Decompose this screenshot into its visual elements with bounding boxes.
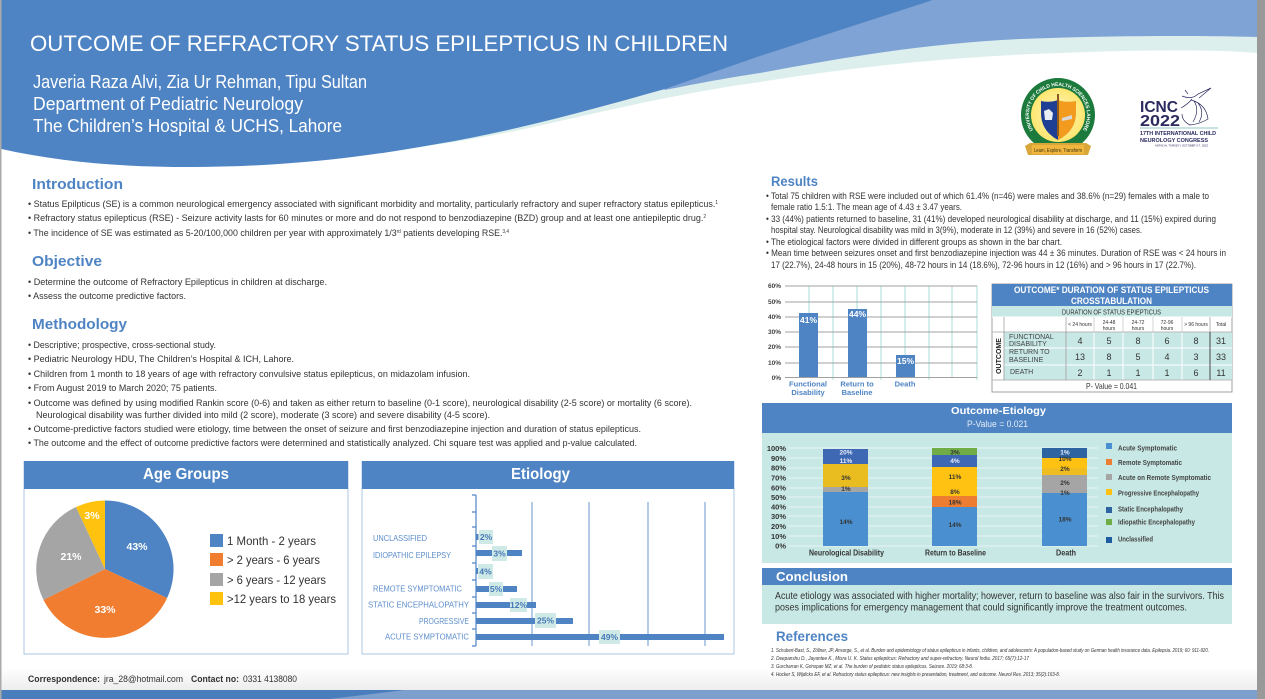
stacked bar chart: 1%: [1060, 490, 1070, 497]
horizontal bar chart: etiology: ACUTE SYMPTOMATIC: [385, 632, 469, 642]
footer band: [2, 690, 1258, 699]
stacked bar legend: Unclassified: [1118, 536, 1153, 544]
table: outcome by duration of status epilepticus: hours: [1132, 326, 1145, 332]
table: outcome by duration of status epilepticus: 31: [1216, 336, 1226, 346]
stacked bar chart: 11%: [840, 458, 853, 465]
logo: ICNC 2022: ANTALYA, TURKEY | OCTOBER 3-7, 2022: [1155, 144, 1208, 148]
heading: outcome-etiology: Outcome-Etiology: [951, 405, 1046, 417]
stacked bar chart: 0%: [775, 542, 786, 550]
pie legend: [210, 534, 336, 606]
text block: methodology bullets: • From August 2019 to March 2020; 75 patients.: [28, 383, 217, 394]
table: outcome by duration of status epilepticus: 8: [1135, 336, 1141, 346]
text block: introduction bullets: [28, 199, 718, 239]
stacked bar chart: 50%: [771, 493, 786, 502]
panel: age groups: [24, 461, 348, 654]
stacked bar chart: 4%: [950, 458, 960, 465]
stacked bar legend: Remote Symptomatic: [1118, 460, 1182, 467]
text block: introduction bullets: 2: [703, 214, 706, 220]
pie legend: > 2 years - 6 years: [227, 553, 320, 567]
table: outcome by duration of status epilepticus: < 24 hours: [1068, 322, 1092, 328]
pie legend: 1 Month - 2 years: [227, 534, 316, 548]
bar chart: outcome at discharge: 30%: [768, 329, 781, 336]
table: outcome by duration of status epilepticus: P- Value = 0.041: [1086, 381, 1137, 391]
stacked bar chart: 10%: [1058, 456, 1072, 463]
horizontal bar chart: etiology: 4%: [479, 566, 492, 576]
stacked bar chart: 14%: [948, 522, 962, 529]
bar chart: outcome at discharge: 40%: [768, 314, 781, 321]
stacked bar legend: Acute on Remote Symptomatic: [1118, 475, 1211, 482]
text block: objective bullets: • Assess the outcome predictive factors.: [28, 291, 186, 302]
bar chart: outcome at discharge: Death: [895, 380, 916, 388]
conclusion text: poses implications for emergency management that could significantly improve the treatment outcomes.: [775, 602, 1187, 614]
heading: outcome-etiology: P-Value = 0.021: [967, 419, 1028, 430]
stacked bar chart: 2%: [1060, 466, 1070, 473]
bar chart: outcome at discharge: 15%: [897, 356, 914, 366]
heading: Introduction: Introduction: [32, 176, 123, 193]
stacked bar chart: 11%: [949, 474, 962, 481]
table: outcome by duration of status epilepticus: 3: [1193, 352, 1199, 362]
stacked bar chart: 18%: [948, 500, 962, 506]
table: outcome by duration of status epilepticus: 24-48: [1103, 320, 1116, 326]
table title: OUTCOME* DURATION OF STATUS EPILEPTICUS: [1014, 285, 1209, 295]
reference list: 2. Deepanshu D., Jayantee K., Misra U. K. Status epilepticus: Refractory and super-refractory. Neurol India. 2017; 65(7):12-17: [770, 656, 1030, 662]
panel: conclusion: [762, 568, 1232, 624]
table: outcome by duration of status epilepticus: 6: [1164, 336, 1170, 346]
heading: outcome-etiology: [951, 405, 1046, 430]
bar chart: outcome at discharge: Functional: [789, 380, 827, 388]
bar chart: outcome at discharge: 20%: [768, 344, 781, 351]
authors and affiliation: Javeria Raza Alvi, Zia Ur Rehman, Tipu Sultan: [33, 72, 367, 92]
heading: Objective: Objective: [32, 253, 102, 270]
table: outcome by duration of status epilepticus: 5: [1106, 336, 1112, 346]
text block: objective bullets: [28, 277, 327, 302]
table: outcome by duration of status epilepticus: 5: [1135, 352, 1141, 362]
table: outcome by duration of status epilepticus: DURATION OF STATUS EPIEPTICUS: [1062, 310, 1161, 316]
logo: ICNC 2022: 2022: [1140, 113, 1180, 130]
text block: objective bullets: • Determine the outcome of Refractory Epilepticus in children at discharge.: [28, 277, 327, 288]
header banner: [2, 0, 1257, 167]
heading: conclusion: Conclusion: [776, 569, 848, 584]
panel: outcome-etiology: [762, 403, 1232, 563]
stacked bar chart: 14%: [839, 519, 853, 526]
stacked bar chart: Neurological Disability: [809, 548, 884, 558]
text block: introduction bullets: • The incidence of SE was estimated as 5-20/100,000 children per year with approximately 1/3: [28, 228, 424, 239]
pie chart: age groups: 21%: [60, 551, 82, 563]
logo: ICNC 2022: 17TH INTERNATIONAL CHILD: [1140, 131, 1216, 137]
stacked bar chart: 3%: [841, 475, 851, 482]
bar chart: outcome at discharge: Return to: [840, 380, 874, 388]
table: outcome by duration of status epilepticus: 1: [1164, 368, 1170, 378]
correspondence line: [28, 674, 297, 684]
text block: methodology bullets: • Outcome-predictive factors studied were etiology, time between the onset of seizure and first benzodiazepine injection and duration of status epilepticus.: [28, 424, 641, 435]
table: outcome by duration of status epilepticus: 4: [1077, 336, 1083, 346]
table: outcome by duration of status epilepticus: 6: [1193, 368, 1199, 378]
stacked bar chart: 60%: [771, 484, 786, 492]
text block: methodology bullets: • Descriptive; prospective, cross-sectional study.: [28, 340, 216, 351]
text block: introduction bullets: 3,4: [503, 229, 509, 235]
stacked bar legend: Acute Symptomatic: [1118, 446, 1177, 452]
stacked bar chart: Return to Baseline: [925, 548, 986, 558]
text block: methodology bullets: • Pediatric Neurology HDU, The Children’s Hospital & ICH, Lahore.: [28, 354, 294, 365]
bar chart: outcome at discharge: 0%: [772, 375, 781, 382]
stacked bar legend: [1106, 443, 1211, 544]
logo: ICNC 2022: NEUROLOGY CONGRESS: [1140, 138, 1208, 144]
table: outcome by duration of status epilepticus: DISABILITY: [1009, 341, 1047, 348]
table: outcome by duration of status epilepticus: 24-72: [1132, 320, 1145, 326]
authors and affiliation: Department of Pediatric Neurology: [33, 94, 303, 114]
table: outcome by duration of status epilepticus: 1: [1106, 368, 1112, 378]
horizontal bar chart: etiology: 5%: [490, 584, 503, 594]
table title: CROSSTABULATION: [1071, 296, 1152, 306]
stacked bar legend: Idiopathic Encephalopathy: [1118, 520, 1195, 526]
stacked bar chart: 30%: [771, 512, 786, 521]
stacked bar chart: 90%: [771, 454, 786, 463]
correspondence line: Correspondence:: [28, 674, 100, 684]
pie chart: age groups: 43%: [126, 541, 148, 553]
text block: results bullets: [766, 191, 1226, 271]
horizontal bar chart: etiology: STATIC ENCEPHALOPATHY: [368, 600, 469, 610]
logo: ICNC 2022: [1140, 88, 1218, 148]
table: outcome by duration of status epilepticus: BASELINE: [1009, 357, 1044, 364]
heading: etiology: Etiology: [511, 466, 570, 483]
table: outcome by duration of status epilepticus: [992, 284, 1232, 392]
stacked bar chart: 20%: [839, 450, 853, 456]
authors and affiliation: The Children’s Hospital & UCHS, Lahore: [33, 116, 342, 136]
stacked bar chart: 20%: [771, 522, 786, 531]
correspondence line: jra_28@hotmail.com: [103, 674, 183, 684]
horizontal bar chart: etiology: 3%: [493, 548, 506, 558]
heading: references: References: [776, 628, 848, 644]
reference list: 4. Hocker S, Wijdicks EF, et al. Refractory status epilepticus: new insights in presentation, treatment, and outcome. Neurol Res. 2013; 35(2):163-8.: [771, 672, 1060, 678]
stacked bar chart: 70%: [771, 474, 786, 482]
table: outcome by duration of status epilepticus: RETURN TO: [1009, 349, 1050, 356]
table: outcome by duration of status epilepticus: 1: [1135, 368, 1141, 378]
stacked bar chart: 2%: [1060, 480, 1070, 487]
bar chart: outcome at discharge: Disability: [791, 388, 826, 397]
stacked bar chart: 3%: [950, 450, 960, 456]
stacked bar chart: 8%: [950, 489, 960, 496]
text block: methodology bullets: • Outcome was defined by using modified Rankin score (0-6) and taken as either return to baseline (0-1 score), neurological disability (2-5 score) or mortality (6 score).: [28, 398, 692, 409]
horizontal bar chart: etiology: 12%: [510, 600, 527, 610]
heading: Methodology: Methodology: [32, 316, 128, 333]
pie chart: age groups: 3%: [84, 510, 100, 522]
text block: results bullets: hospital stay. Neurological disability was mild in 3(9%), moderate in 12 (39%) and severe in 16 (52%) cases.: [771, 225, 1142, 236]
table: outcome by duration of status epilepticus: 33: [1216, 352, 1226, 362]
table: outcome by duration of status epilepticus: OUTCOME: [996, 338, 1003, 374]
panel: etiology: [362, 461, 734, 654]
heading: results: Results: [771, 174, 818, 189]
text block: results bullets: 17 (22.7%), 24-48 hours in 15 (20%), 48-72 hours in 14 (18.6%), 72-96 hours in 12 (16%) and > 96 hours in 17 (22.7%).: [771, 260, 1196, 271]
horizontal bar chart: etiology: [368, 495, 724, 646]
pie legend: >12 years to 18 years: [227, 592, 336, 606]
table title: [992, 284, 1232, 306]
text block: methodology bullets: • Children from 1 month to 18 years of age with refractory convulsive status epilepticus, on midazolam infusion.: [28, 369, 470, 380]
pie chart: age groups: 33%: [94, 604, 116, 616]
stacked bar chart: [767, 444, 1098, 558]
conclusion text: [775, 590, 1224, 614]
table: outcome by duration of status epilepticus: 8: [1193, 336, 1199, 346]
stacked bar chart: 18%: [1058, 516, 1072, 524]
pie chart: age groups: [36, 500, 174, 638]
stacked bar chart: 80%: [771, 464, 786, 472]
table: outcome by duration of status epilepticus: Total: [1216, 322, 1226, 328]
bar chart: outcome at discharge: 44%: [849, 309, 866, 319]
logo: ICNC 2022: ICNC: [1140, 99, 1178, 116]
stacked bar legend: Progressive Encephalopathy: [1118, 490, 1199, 498]
table: outcome by duration of status epilepticus: 8: [1106, 352, 1112, 362]
table: outcome by duration of status epilepticus: hours: [1103, 326, 1116, 332]
text block: methodology bullets: • The outcome and the effect of outcome predictive factors were determined and statistically analyzed. Chi square test was applied and p-value calculated.: [28, 438, 637, 449]
authors and affiliation: [33, 72, 367, 136]
table: outcome by duration of status epilepticus: 13: [1075, 352, 1085, 362]
table: outcome by duration of status epilepticus: hours: [1161, 326, 1174, 332]
bar chart: outcome at discharge: [768, 283, 977, 397]
text block: results bullets: female ratio 1.5:1. The mean age of 4.43 ± 3.47 years.: [771, 202, 962, 213]
horizontal bar chart: etiology: PROGRESSIVE: [419, 616, 469, 626]
table: outcome by duration of status epilepticus: 72-96: [1161, 320, 1174, 326]
table: outcome by duration of status epilepticus: 2: [1077, 368, 1083, 378]
bar chart: outcome at discharge: 50%: [768, 299, 781, 306]
table: outcome by duration of status epilepticus: > 96 hours: [1184, 322, 1208, 328]
text block: introduction bullets: • Refractory status epilepticus (RSE) - Seizure activity lasts for 60 minutes or more and do not respond to benzodiazepine (BZD) group and at least one antiepileptic drug.: [28, 213, 741, 224]
stacked bar chart: 10%: [771, 532, 786, 541]
stacked bar legend: Static Encephalopathy: [1118, 506, 1183, 514]
stacked bar chart: 1%: [841, 486, 851, 493]
table: outcome by duration of status epilepticus: FUNCTIONAL: [1009, 334, 1054, 341]
horizontal bar chart: etiology: 25%: [537, 616, 554, 626]
reference list: 3. Gurcharran K, Grinspan MZ, et al. The burden of pediatric status epilepticus. Seizure. 2019; 68:3-8.: [771, 664, 973, 670]
stacked bar chart: 1%: [1060, 450, 1070, 456]
text block: results bullets: • The etiological factors were divided in different groups as shown in the bar chart.: [766, 237, 1062, 248]
logo: University of Child Health Sciences: UNIVERSITY OF CHILD HEALTH SCIENCES LAHORE: [1026, 82, 1090, 132]
stacked bar chart: 40%: [771, 502, 786, 512]
reference list: [770, 648, 1209, 678]
logo: University of Child Health Sciences: [1021, 78, 1095, 155]
pie legend: > 6 years - 12 years: [227, 573, 326, 587]
text block: introduction bullets: 1: [715, 200, 718, 206]
text block: methodology bullets: Neurological disability was further divided into mild (2 score), moderate (3 score) and severe disability (4-5 score).: [36, 410, 490, 421]
bar chart: outcome at discharge: 60%: [768, 283, 781, 290]
logo: University of Child Health Sciences: Learn, Explore, Transform: [1034, 148, 1082, 154]
horizontal bar chart: etiology: IDIOPATHIC EPILEPSY: [373, 550, 451, 560]
horizontal bar chart: etiology: REMOTE SYMPTOMATIC: [373, 584, 462, 594]
horizontal bar chart: etiology: UNCLASSIFIED: [373, 533, 427, 543]
text block: introduction bullets: patients developing RSE.: [401, 228, 503, 239]
horizontal bar chart: etiology: 49%: [601, 632, 618, 642]
text block: introduction bullets: rd: [397, 229, 401, 235]
bar chart: outcome at discharge: 10%: [768, 360, 781, 367]
text block: introduction bullets: • Status Epilpticus (SE) is a common neurological emergency associated with significant morbidity and mortality, particularly refractory and super refractory status epilepticus.: [28, 199, 756, 210]
table: outcome by duration of status epilepticus: DEATH: [1010, 369, 1033, 376]
title: OUTCOME OF REFRACTORY STATUS EPILEPTICUS IN CHILDREN: [30, 31, 728, 56]
correspondence line: Contact no:: [191, 674, 239, 684]
text block: methodology bullets: [28, 340, 692, 449]
table: outcome by duration of status epilepticus: 4: [1164, 352, 1170, 362]
horizontal bar chart: etiology: 2%: [480, 532, 493, 542]
heading: age groups: Age Groups: [143, 466, 229, 483]
bar chart: outcome at discharge: 41%: [800, 315, 817, 325]
stacked bar chart: Death: [1056, 548, 1076, 558]
stacked bar chart: 100%: [767, 444, 786, 453]
correspondence line: 0331 4138080: [243, 674, 297, 684]
table: outcome by duration of status epilepticus: 11: [1216, 368, 1226, 378]
bar chart: outcome at discharge: Baseline: [842, 388, 872, 397]
